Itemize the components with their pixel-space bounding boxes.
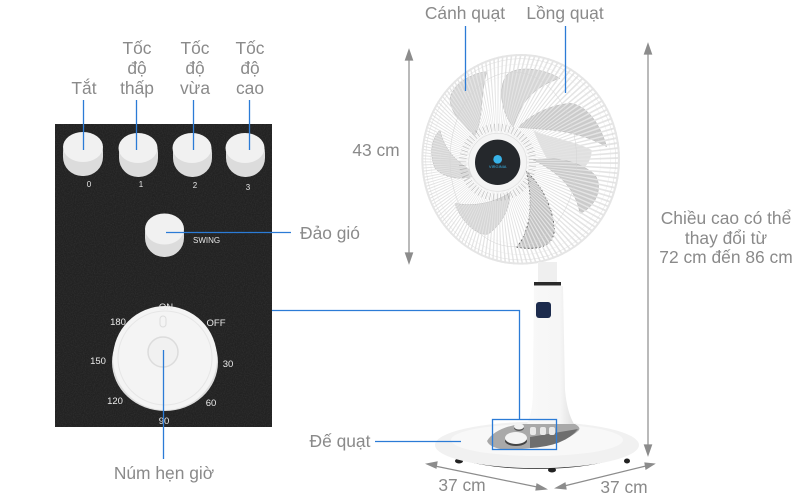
knob: off [63,132,103,176]
dimension: total height: Chiều cao có thể [661,208,791,228]
callout: medium speed: độ [185,58,205,78]
fan grille [421,55,619,264]
timer scale labels: 150 [90,356,106,367]
knob numbers: 0 [87,180,92,189]
callout: high speed: cao [236,78,264,98]
callout: low speed [120,38,154,150]
base [435,422,639,472]
callout: high speed: Tốc [236,38,265,58]
timer scale labels: OFF [206,318,226,329]
fan stand [435,262,639,472]
dimension: base depth [427,462,546,495]
dimension: base width: 37 cm [600,477,648,497]
callout: medium speed: Tốc [180,38,210,58]
knob: swing [145,214,184,257]
dimension: base depth: 37 cm [438,475,486,495]
callout: off [71,78,97,150]
callout: cage [526,3,604,93]
callout: cage: Lồng quạt [526,3,604,23]
knob numbers: 1 [139,180,144,189]
callout: base: Đế quạt [310,431,371,451]
collar [534,282,561,286]
timer scale labels: 120 [107,396,123,407]
timer scale labels [90,302,233,427]
knob: high speed [226,133,265,177]
callout: off: Tắt [71,78,97,98]
callout: timer knob: Núm hẹn giờ [114,463,214,483]
timer scale labels: 30 [223,359,233,370]
fan head [421,55,619,264]
dimension: base width [556,463,654,497]
callout: medium speed: vừa [180,78,210,98]
callout: swing: Đảo gió [300,223,360,243]
pole [527,286,574,424]
badge [536,302,551,318]
knob numbers [87,180,251,192]
timer knob [112,306,218,411]
fan blades [432,69,607,248]
dimension: head height [352,50,412,263]
callout: high speed [236,38,265,150]
hub [469,133,527,191]
knob numbers: 2 [193,181,198,190]
callout: blade [425,3,505,91]
timer scale labels: ON [159,302,173,313]
neck [538,262,557,284]
callout: low speed: độ [127,58,147,78]
callout: low speed: thấp [120,78,154,98]
hub: VIRGINIA [489,164,507,169]
knob: medium speed [172,133,212,177]
swing label: SWING [193,236,220,245]
callout: timer knob [114,350,214,483]
knob numbers: 3 [246,183,251,192]
panel: control panel close-up [55,124,272,427]
dimension: head height: 43 cm [352,140,400,160]
timer scale labels: 180 [110,317,126,328]
dimension: total height: 72 cm đến 86 cm [659,247,793,267]
timer scale labels: 90 [159,416,169,427]
callout: low speed: Tốc [122,38,152,58]
callout: high speed: độ [240,58,260,78]
knob: low speed [118,133,158,177]
callout: blade: Cánh quạt [425,3,505,23]
callout: medium speed [180,38,210,150]
dimension: total height: thay đổi từ [685,228,767,248]
dimension: total height [644,44,793,455]
timer scale labels: 60 [206,398,216,409]
connector: panel to base controls [272,310,556,450]
